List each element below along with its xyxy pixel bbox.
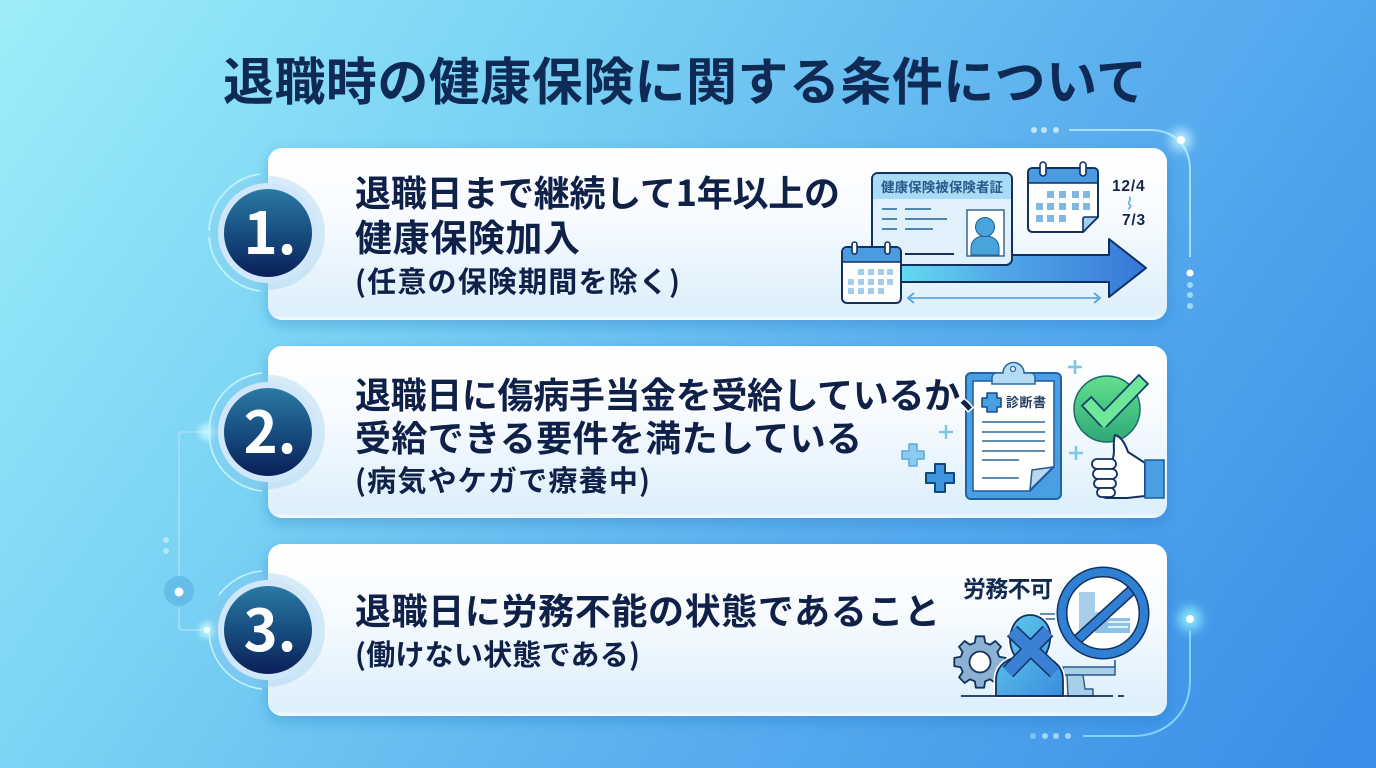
connector: top right [1031,127,1194,309]
icon: prohibition sign [1061,571,1145,655]
icon: monitor [1040,614,1115,696]
ground line [961,695,1124,697]
dates [1112,178,1146,229]
label: 労務不可: 労務不可 [963,576,1053,602]
panel 1 text: 退職日まで継続して1年以上の [355,165,840,217]
panel 1 text [355,165,840,301]
icon: calendar right [1028,162,1098,232]
icon: calendar left [842,242,901,303]
clipboard: 診断書 [1006,395,1046,410]
dates: 12/4 [1112,178,1145,195]
clipboard [966,363,1061,499]
icon: gear [954,636,1006,688]
dates: 7/3 [1122,212,1146,229]
title: 退職時の健康保険に関する条件について [223,41,1147,115]
icon: person [996,615,1063,696]
panel 3 [268,544,1167,716]
icon: medical certificate [902,360,1164,499]
panel 2 [268,346,1167,518]
panel 2 text [355,367,995,500]
panel 2 text: (病気やケガで療養中) [355,458,650,500]
connector: bottom right [1030,607,1202,739]
double arrow: duration [908,293,1100,303]
number badge 3 [209,571,325,689]
panel 3 text [355,583,940,674]
panel 1 text: (任意の保険期間を除く) [355,259,680,301]
number badge 2: 2. [243,386,297,470]
number badge 1 [209,174,325,291]
icon: insurance period [842,162,1146,303]
icon: insurance card: 健康保険被保険者証 [881,179,1004,195]
panel 3 text: (働けない状態である) [355,632,640,674]
panel 2 text: 受給できる要件を満たしている [355,410,862,462]
connector: left [163,424,215,638]
number badge 1: 1. [243,187,297,271]
arrow: period [900,239,1146,297]
icon: unable to work [954,571,1145,696]
panel 1 [268,148,1167,320]
icon: insurance card [872,173,1012,265]
pluses [902,360,1083,492]
number badge 3: 3. [243,584,297,668]
panel 1 text: 健康保険加入 [355,208,580,262]
panel 2 text: 退職日に傷病手当金を受給しているか、 [355,367,995,419]
panel 3 text: 退職日に労務不能の状態であること [355,583,940,635]
number badge 2 [209,373,325,491]
icon: check mark [1074,376,1140,442]
icon: thumbs up [1092,435,1164,498]
